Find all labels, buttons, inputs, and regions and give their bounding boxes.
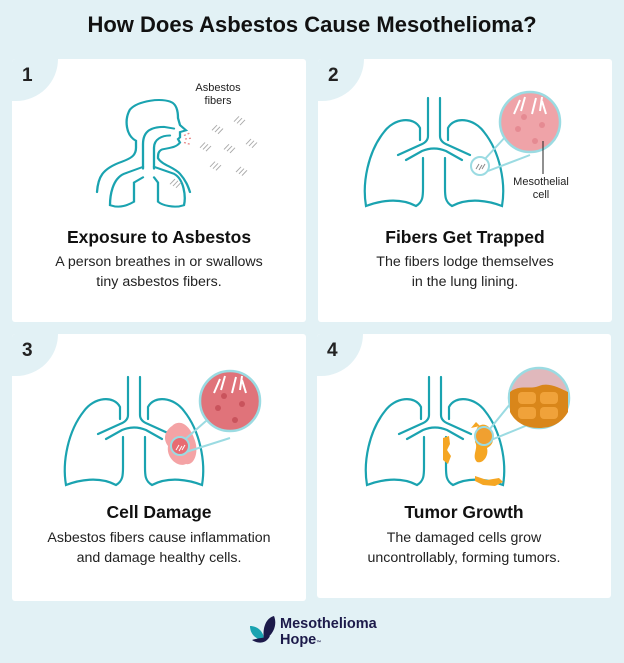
number badge 1 xyxy=(12,59,58,101)
number badge 2: 2 xyxy=(328,65,339,86)
number badge 4: 4 xyxy=(327,340,338,361)
description xyxy=(368,530,560,566)
logo: Mesothelioma Hope: Mesothelioma xyxy=(280,616,377,632)
panel 1: exposure xyxy=(12,59,306,322)
panel 3: cell damage xyxy=(12,334,306,601)
number badge 1: 1 xyxy=(22,65,33,86)
logo: Mesothelioma Hope xyxy=(250,616,377,648)
illustration: person breathing fibers xyxy=(96,82,258,208)
panel 4: tumor growth xyxy=(317,334,611,598)
title: How Does Asbestos Cause Mesothelioma? xyxy=(87,12,537,37)
description: Asbestos fibers cause inflammation xyxy=(47,530,271,546)
description: The fibers lodge themselves xyxy=(376,254,554,270)
heading: Exposure to Asbestos xyxy=(67,227,251,247)
icon: butterfly xyxy=(250,616,276,643)
description: tiny asbestos fibers. xyxy=(96,274,222,290)
illustration: lungs with magnified mesothelial cells xyxy=(364,90,569,208)
illustration: inflamed lung xyxy=(64,370,262,486)
description xyxy=(376,254,554,290)
heading: Tumor Growth xyxy=(404,502,524,522)
number badge 4 xyxy=(317,334,363,376)
description: in the lung lining. xyxy=(412,274,518,290)
description xyxy=(47,530,271,566)
description: and damage healthy cells. xyxy=(77,550,241,566)
panel 2: trapped xyxy=(318,59,612,322)
description: A person breathes in or swallows xyxy=(55,254,263,270)
number badge 3 xyxy=(12,334,58,376)
label: asbestos fibers: Asbestos xyxy=(195,82,241,94)
description: uncontrollably, forming tumors. xyxy=(368,550,560,566)
heading: Fibers Get Trapped xyxy=(385,227,545,247)
description xyxy=(55,254,263,290)
heading: Cell Damage xyxy=(106,502,212,522)
label: mesothelial cell: Mesothelial xyxy=(513,176,569,188)
illustration: person breathing fibers: fibers xyxy=(205,95,232,107)
logo: Mesothelioma Hope: Hope™ xyxy=(280,632,321,648)
description: The damaged cells grow xyxy=(387,530,541,546)
illustration: lungs with magnified mesothelial cells: cell xyxy=(533,189,549,201)
number badge 2 xyxy=(318,59,364,101)
number badge 3: 3 xyxy=(22,340,33,361)
illustration: lungs with tumors xyxy=(364,366,570,486)
